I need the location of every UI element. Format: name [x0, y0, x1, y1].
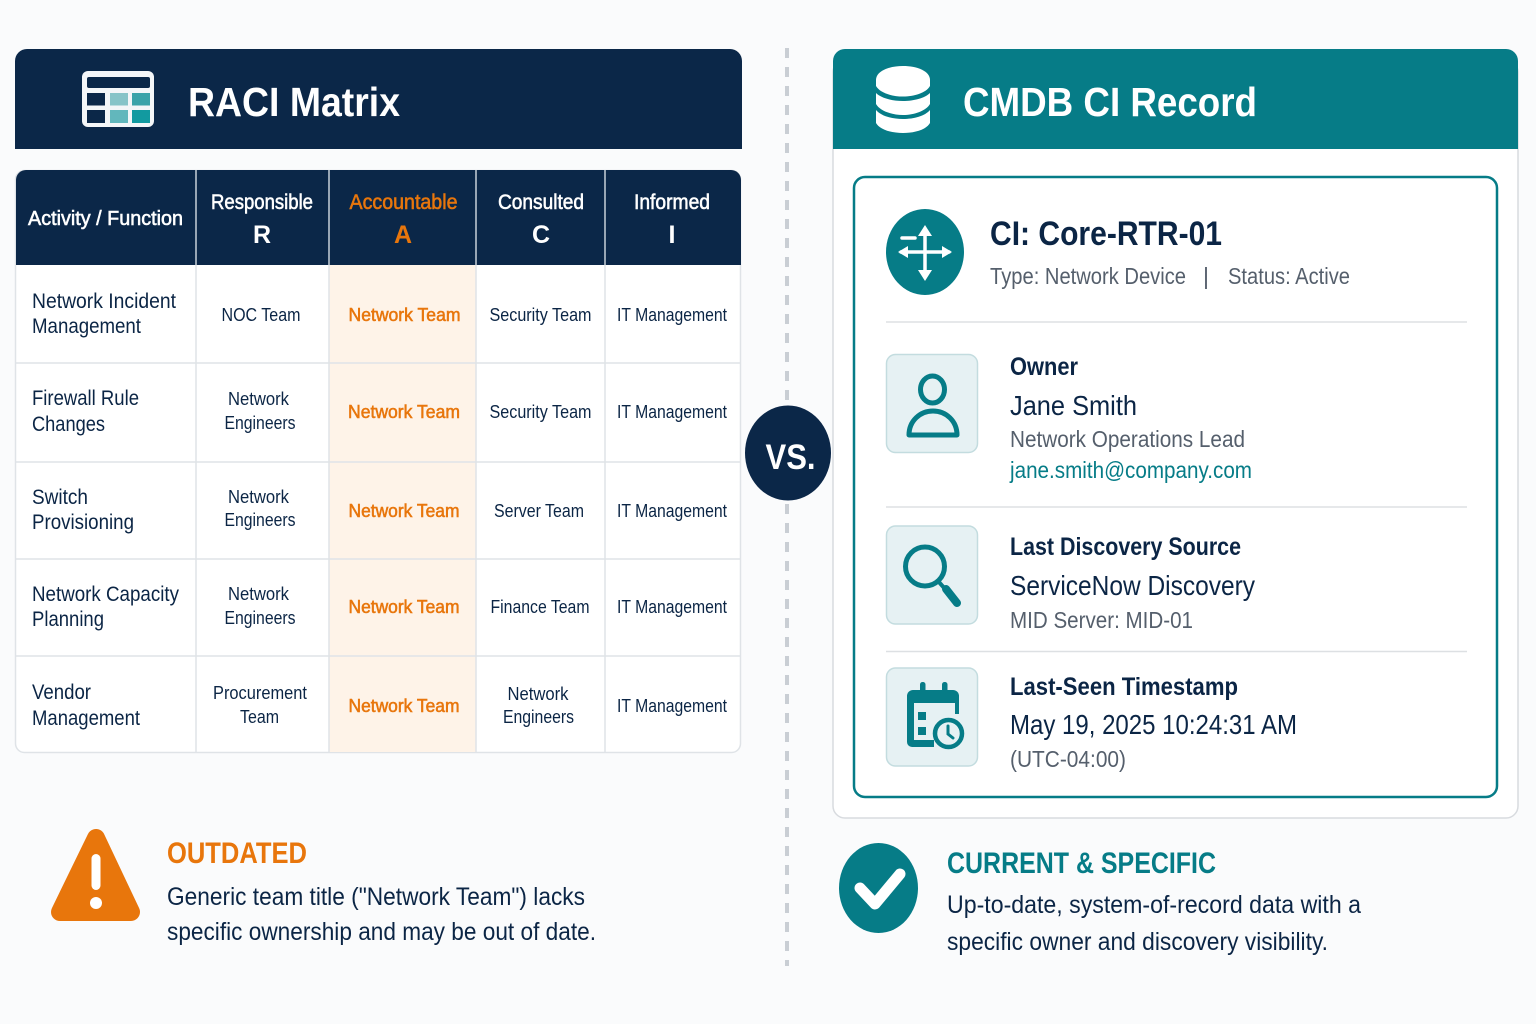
callout: current and specific: Up-to-date, system-of-record data with a — [947, 891, 1361, 919]
section: last discovery source — [886, 526, 1255, 633]
panel: RACI header — [15, 49, 742, 149]
section: owner: Owner — [1010, 353, 1078, 381]
row: Network Incident Management: Management — [32, 315, 141, 338]
icon: magnifier — [886, 526, 978, 624]
CI record card — [854, 177, 1497, 797]
table header row: C — [532, 221, 550, 249]
badge: VS — [745, 406, 831, 500]
CI heading — [886, 209, 1350, 295]
badge: VS: VS. — [766, 438, 816, 477]
row: Vendor Management: Management — [32, 707, 140, 730]
row: Network Incident Management: IT Management — [617, 305, 727, 325]
row: Firewall Rule Changes: Firewall Rule — [32, 387, 139, 410]
section: last-seen timestamp: Last-Seen Timestamp — [1010, 673, 1238, 701]
row: Vendor Management: Engineers — [503, 707, 574, 727]
panel: RACI table — [16, 170, 741, 753]
callout: outdated — [60, 837, 596, 946]
icon: check circle — [839, 843, 918, 933]
row: Network Incident Management: NOC Team — [222, 305, 300, 325]
CMDB header: CMDB CI Record — [963, 79, 1257, 125]
row: Vendor Management — [32, 681, 727, 730]
section: last-seen timestamp: May 19, 2025 10:24:31 AM — [1010, 709, 1297, 740]
dashed divider — [785, 48, 789, 966]
callout: current and specific: specific owner and discovery visibility. — [947, 928, 1328, 956]
row: Switch Provisioning: Engineers — [224, 510, 296, 530]
row: Switch Provisioning — [32, 486, 727, 534]
row: Switch Provisioning: Network — [228, 487, 290, 507]
row: Network Capacity Planning: IT Management — [617, 597, 727, 617]
icon: table — [82, 71, 154, 127]
row: Vendor Management: Team — [240, 707, 279, 727]
row: Switch Provisioning: Server Team — [494, 501, 584, 521]
row: Firewall Rule Changes: Engineers — [224, 413, 296, 433]
icon: database — [876, 66, 930, 133]
section: last-seen timestamp: (UTC-04:00) — [1010, 746, 1126, 772]
row: Switch Provisioning: Network Team — [348, 501, 460, 521]
row: Firewall Rule Changes: Changes — [32, 413, 105, 436]
row: Network Capacity Planning: Planning — [32, 608, 104, 631]
table header row: I — [669, 221, 675, 249]
section: owner: jane.smith@company.com — [1009, 457, 1252, 483]
row: Firewall Rule Changes: IT Management — [617, 402, 727, 422]
section: owner: Network Operations Lead — [1010, 426, 1245, 452]
table header row — [16, 170, 741, 265]
row: Network Incident Management: Security Team — [490, 305, 592, 325]
row: Firewall Rule Changes: Security Team — [490, 402, 592, 422]
section: last discovery source: Last Discovery Source — [1010, 533, 1241, 561]
table header row: Responsible — [211, 191, 313, 214]
row: Network Capacity Planning: Finance Team — [490, 597, 590, 617]
section: last discovery source: ServiceNow Discovery — [1010, 570, 1255, 601]
section: last-seen timestamp — [886, 668, 1297, 772]
callout: outdated: OUTDATED — [167, 837, 307, 870]
table header row: A — [394, 221, 412, 249]
section: owner — [886, 353, 1252, 483]
icon: calendar with clock — [886, 668, 978, 766]
section: last discovery source: MID Server: MID-01 — [1010, 607, 1193, 633]
row: Network Capacity Planning: Network — [228, 584, 290, 604]
table header row: Activity / Function — [28, 208, 183, 230]
row: Vendor Management: IT Management — [617, 696, 727, 716]
callout: outdated: Generic team title ("Network Team") lacks — [167, 883, 585, 911]
row: Vendor Management: Procurement — [213, 683, 307, 703]
CI heading: Status: Active — [1228, 263, 1350, 289]
row: Network Incident Management: Network Team — [348, 305, 460, 325]
callout: current and specific — [839, 843, 1361, 956]
row: Network Incident Management — [32, 290, 727, 338]
CI heading: CI: Core-RTR-01 — [990, 215, 1222, 253]
row: Vendor Management: Network Team — [348, 696, 460, 716]
icon: person — [886, 354, 978, 452]
accountable column highlight — [329, 265, 476, 752]
CI heading: | — [1203, 263, 1209, 289]
icon: warning triangle — [60, 838, 131, 912]
panel: CMDB — [833, 49, 1518, 818]
table header row: Consulted — [498, 191, 584, 214]
row: Vendor Management: Vendor — [32, 681, 91, 704]
row: Firewall Rule Changes: Network — [228, 389, 290, 409]
title: RACI Matrix: RACI Matrix — [188, 79, 400, 125]
row: Switch Provisioning: IT Management — [617, 501, 727, 521]
CI heading: Type: Network Device — [990, 263, 1186, 289]
table header row: Accountable — [350, 191, 458, 214]
section: owner: Jane Smith — [1010, 390, 1137, 421]
row: Network Capacity Planning — [32, 583, 727, 631]
table header row: R — [253, 221, 271, 249]
callout: outdated: specific ownership and may be out of date. — [167, 918, 596, 946]
CMDB header — [833, 49, 1518, 149]
row: Network Capacity Planning: Network Team — [348, 597, 460, 617]
row: Network Incident Management: Network Incident — [32, 290, 176, 313]
row: Firewall Rule Changes — [32, 387, 727, 436]
icon: router — [886, 209, 964, 295]
row: Switch Provisioning: Switch — [32, 486, 88, 509]
table header row: Informed — [634, 191, 710, 214]
row: Network Capacity Planning: Engineers — [224, 608, 296, 628]
row: Vendor Management: Network — [508, 684, 569, 704]
callout: current and specific: CURRENT & SPECIFIC — [947, 847, 1216, 880]
row: Network Capacity Planning: Network Capacity — [32, 583, 179, 606]
row: Switch Provisioning: Provisioning — [32, 511, 134, 534]
row: Firewall Rule Changes: Network Team — [348, 402, 460, 422]
